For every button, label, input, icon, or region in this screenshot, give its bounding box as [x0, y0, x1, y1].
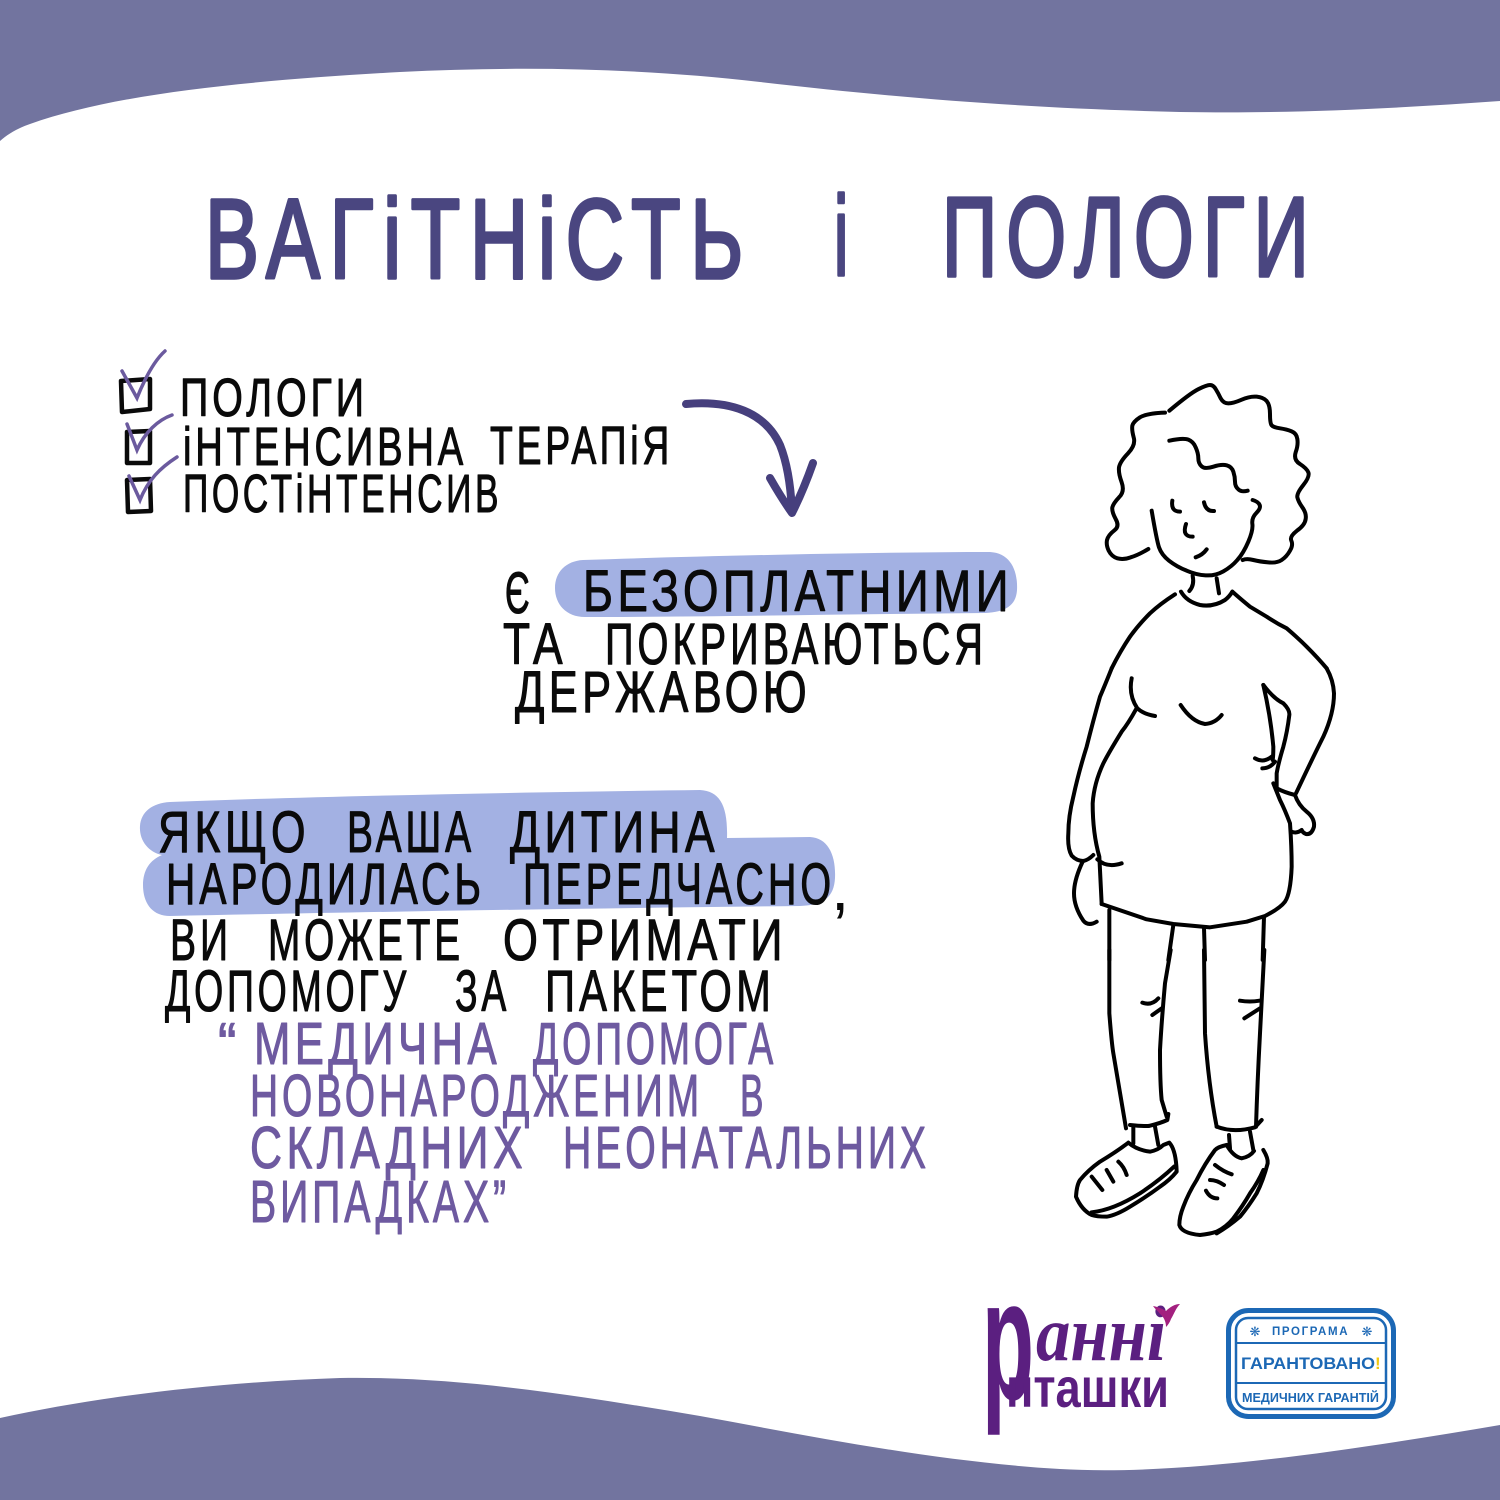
text block: free and state-covered	[503, 559, 1013, 725]
text block: premature baby help: ПАКЕТОМ	[545, 959, 775, 1024]
text block: premature baby help: НАРОДИЛАСЬ	[166, 852, 485, 917]
stamp exclamation: !	[1375, 1354, 1381, 1373]
stamp ornament left: ❋	[1250, 1325, 1261, 1340]
text block: package name: СКЛАДНИХ	[250, 1115, 527, 1181]
title: ПОЛОГИ	[942, 174, 1318, 300]
logo: Ранні пташки	[982, 1244, 1180, 1436]
text block: package name	[218, 1011, 930, 1235]
text block: premature baby help: ДИТИНА	[510, 800, 719, 865]
highlight: premature baby	[140, 790, 835, 916]
torso and arms	[1068, 668, 1334, 960]
legs and shoes	[1076, 950, 1268, 1235]
text block: premature baby help: ,	[831, 850, 849, 924]
bottom wave band	[0, 1378, 1500, 1500]
arrow	[686, 403, 813, 513]
head and hair	[1107, 385, 1327, 668]
title	[205, 173, 1318, 302]
text block: package name: МЕДИЧНА	[254, 1011, 501, 1077]
text block: package name: “	[218, 1011, 242, 1077]
checklist item: пологи	[121, 351, 368, 428]
text block: package name: НЕОНАТАЛЬНИХ	[563, 1115, 930, 1181]
text block: premature baby help: ЯКЩО	[158, 800, 310, 865]
title: ВАГіТНіСТЬ	[205, 176, 753, 302]
illustration: pregnant woman	[1068, 385, 1334, 1235]
text block: premature baby help	[158, 800, 849, 1024]
text block: package name: ВИПАДКАХ”	[250, 1169, 510, 1235]
text block: premature baby help: ОТРИМАТИ	[503, 908, 787, 973]
text block: premature baby help: ВАША	[347, 800, 475, 865]
text block: free and state-covered: ПОКРИВАЮТЬСЯ	[605, 612, 987, 677]
highlight: free of charge	[555, 552, 1017, 617]
logo word ранні: анні	[1036, 1290, 1166, 1377]
logo word пташки: пташки	[1006, 1356, 1169, 1419]
text block: free and state-covered: БЕЗОПЛАТНИМИ	[583, 559, 1013, 624]
stamp bottom line: МЕДИЧНИХ ГАРАНТІЙ	[1242, 1390, 1379, 1405]
top wave band	[0, 0, 1500, 141]
text block: free and state-covered: ДЕРЖАВОЮ	[515, 660, 811, 725]
text block: premature baby help: ВИ	[170, 908, 232, 973]
text block: package name: НОВОНАРОДЖЕНИМ	[250, 1063, 703, 1129]
checklist item: інтенсивна терапія: іНТЕНСИВНА	[183, 417, 467, 477]
text block: premature baby help: ДОПОМОГУ	[165, 959, 410, 1024]
text block: premature baby help: МОЖЕТЕ	[268, 908, 464, 973]
stamp top line: ПРОГРАМА	[1272, 1326, 1349, 1338]
checklist item: інтенсивна терапія: ТЕРАПіЯ	[490, 416, 673, 476]
checklist of covered services	[121, 351, 673, 524]
text block: free and state-covered: Є	[505, 561, 533, 626]
text block: premature baby help: ЗА	[455, 959, 510, 1024]
text block: free and state-covered: ТА	[503, 612, 567, 677]
stamp: Програма медичних гарантій	[1228, 1310, 1394, 1416]
text block: premature baby help: ПЕРЕДЧАСНО	[523, 852, 835, 917]
stamp ornament right: ❋	[1362, 1325, 1373, 1340]
text block: package name: ДОПОМОГА	[533, 1011, 777, 1077]
checklist item: постінтенсив	[127, 457, 502, 524]
checklist item: постінтенсив: ПОСТіНТЕНСИВ	[183, 464, 502, 524]
title: і	[834, 173, 856, 299]
text block: package name: В	[740, 1063, 767, 1129]
logo: Ранні пташки: р	[982, 1244, 1034, 1436]
checklist item: пологи: ПОЛОГИ	[180, 368, 368, 428]
logo bird	[1153, 1304, 1180, 1327]
stamp main word: ГАРАНТОВАНО	[1241, 1354, 1375, 1373]
